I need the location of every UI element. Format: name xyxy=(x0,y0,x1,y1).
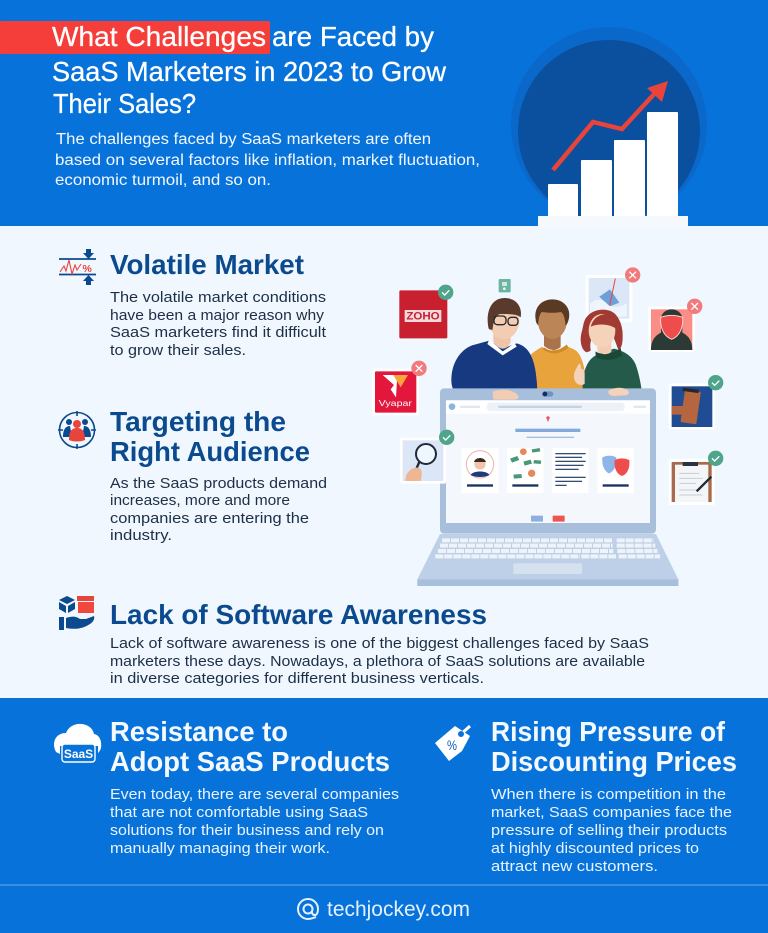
heading: Targeting the xyxy=(110,406,286,437)
body text: attract new customers. xyxy=(491,858,658,875)
heading: Volatile Market xyxy=(110,249,304,280)
card: vyapar: Vyapar xyxy=(379,398,412,408)
body text: SaaS marketers find it difficult xyxy=(110,324,327,341)
body text: in diverse categories for different business verticals. xyxy=(110,670,484,687)
title: Their Sales? xyxy=(53,88,196,119)
small green tag xyxy=(499,279,511,292)
screen card: masks xyxy=(597,448,634,493)
person: blue sweater man xyxy=(451,298,537,400)
body text: industry. xyxy=(110,527,172,544)
laptop xyxy=(417,388,678,586)
panel: bottom blue section xyxy=(0,698,768,933)
icon: SaaS cloud: SaaS xyxy=(64,747,93,761)
body text xyxy=(110,289,327,359)
screen xyxy=(446,400,650,523)
intro text: The challenges faced by SaaS marketers are often xyxy=(56,131,431,148)
screen card: text xyxy=(552,448,589,493)
intro text xyxy=(55,131,480,189)
body text xyxy=(491,786,732,875)
body text: The volatile market conditions xyxy=(110,289,326,306)
body text: marketers these days. Nowadays, a plethora of SaaS solutions are available xyxy=(110,653,645,670)
body text: manually managing their work. xyxy=(110,840,330,857)
heading xyxy=(110,716,390,777)
card: vyapar xyxy=(372,361,427,415)
section: discounting prices xyxy=(435,716,737,875)
screen buttons xyxy=(531,516,565,522)
body text: increases, more and more xyxy=(110,492,290,509)
icon: software box in hand xyxy=(59,596,94,630)
intro text: based on several factors like inflation, market fluctuation, xyxy=(55,152,480,169)
heading: Lack of Software Awareness xyxy=(110,599,487,630)
icon: techjockey mark xyxy=(298,899,318,919)
icon: volatile market: % xyxy=(82,263,92,275)
section: volatile market xyxy=(59,249,327,359)
title: What Challenges xyxy=(52,21,266,52)
icon: target audience xyxy=(58,411,96,449)
heading xyxy=(110,406,310,467)
title highlight xyxy=(0,21,270,54)
person: green sweater woman xyxy=(574,310,642,393)
body text: to grow their sales. xyxy=(110,342,246,359)
screen card: person xyxy=(462,448,498,493)
title xyxy=(52,21,447,119)
body text: Even today, there are several companies xyxy=(110,786,399,803)
body text xyxy=(110,475,327,544)
body text: market, SaaS companies face the xyxy=(491,804,732,821)
page logo xyxy=(546,416,550,422)
body text: As the SaaS products demand xyxy=(110,475,327,492)
heading: Discounting Prices xyxy=(491,746,737,777)
body text xyxy=(110,635,649,687)
intro text: economic turmoil, and so on. xyxy=(55,172,271,189)
body text: at highly discounted prices to xyxy=(491,840,699,857)
panel: header xyxy=(0,0,768,227)
heading: Rising Pressure of xyxy=(491,716,726,747)
keyboard xyxy=(435,540,660,556)
body text: that are not comfortable using SaaS xyxy=(110,804,368,821)
body text: solutions for their business and rely on xyxy=(110,822,384,839)
hands on lid xyxy=(493,390,519,400)
icon: discount tag xyxy=(435,726,470,761)
icon: discount tag: % xyxy=(447,737,457,753)
card: clipboard xyxy=(669,451,723,505)
brand name: techjockey.com xyxy=(327,898,470,921)
icon: SaaS cloud xyxy=(54,724,101,762)
card: zoho: ZOHO xyxy=(406,311,440,323)
title: SaaS Marketers in 2023 to Grow xyxy=(52,56,447,87)
card: mask xyxy=(648,299,702,352)
heading: Right Audience xyxy=(110,436,310,467)
card: zoho xyxy=(399,285,453,338)
card: chart on paper xyxy=(586,267,640,322)
webcam xyxy=(542,391,553,397)
heading xyxy=(491,716,737,777)
laptop base xyxy=(417,534,678,586)
trackpad xyxy=(513,563,582,574)
screen card: money xyxy=(507,448,544,493)
body text: have been a major reason why xyxy=(110,307,325,324)
page heading bars xyxy=(515,429,580,438)
icon: volatile market xyxy=(59,249,96,285)
body text: Lack of software awareness is one of the biggest challenges faced by SaaS xyxy=(110,635,649,652)
laptop lid xyxy=(440,388,656,534)
card: magnifier xyxy=(400,430,454,484)
heading: Resistance to xyxy=(110,716,288,747)
section: lack of software awareness xyxy=(59,596,649,687)
title: are Faced by xyxy=(272,21,434,52)
section: targeting the right audience xyxy=(58,406,327,544)
body text xyxy=(110,786,399,857)
person: orange sweater xyxy=(527,299,586,393)
card: gavel xyxy=(669,375,723,429)
illustration: team behind laptop with app cards xyxy=(372,267,723,586)
body text: pressure of selling their products xyxy=(491,822,727,839)
heading: Adopt SaaS Products xyxy=(110,746,390,777)
browser bar xyxy=(446,400,650,414)
section: resistance to adopt xyxy=(54,716,399,857)
body text: companies are entering the xyxy=(110,510,309,527)
growth chart icon xyxy=(511,27,707,227)
footer logo xyxy=(298,898,470,921)
body text: When there is competition in the xyxy=(491,786,726,803)
